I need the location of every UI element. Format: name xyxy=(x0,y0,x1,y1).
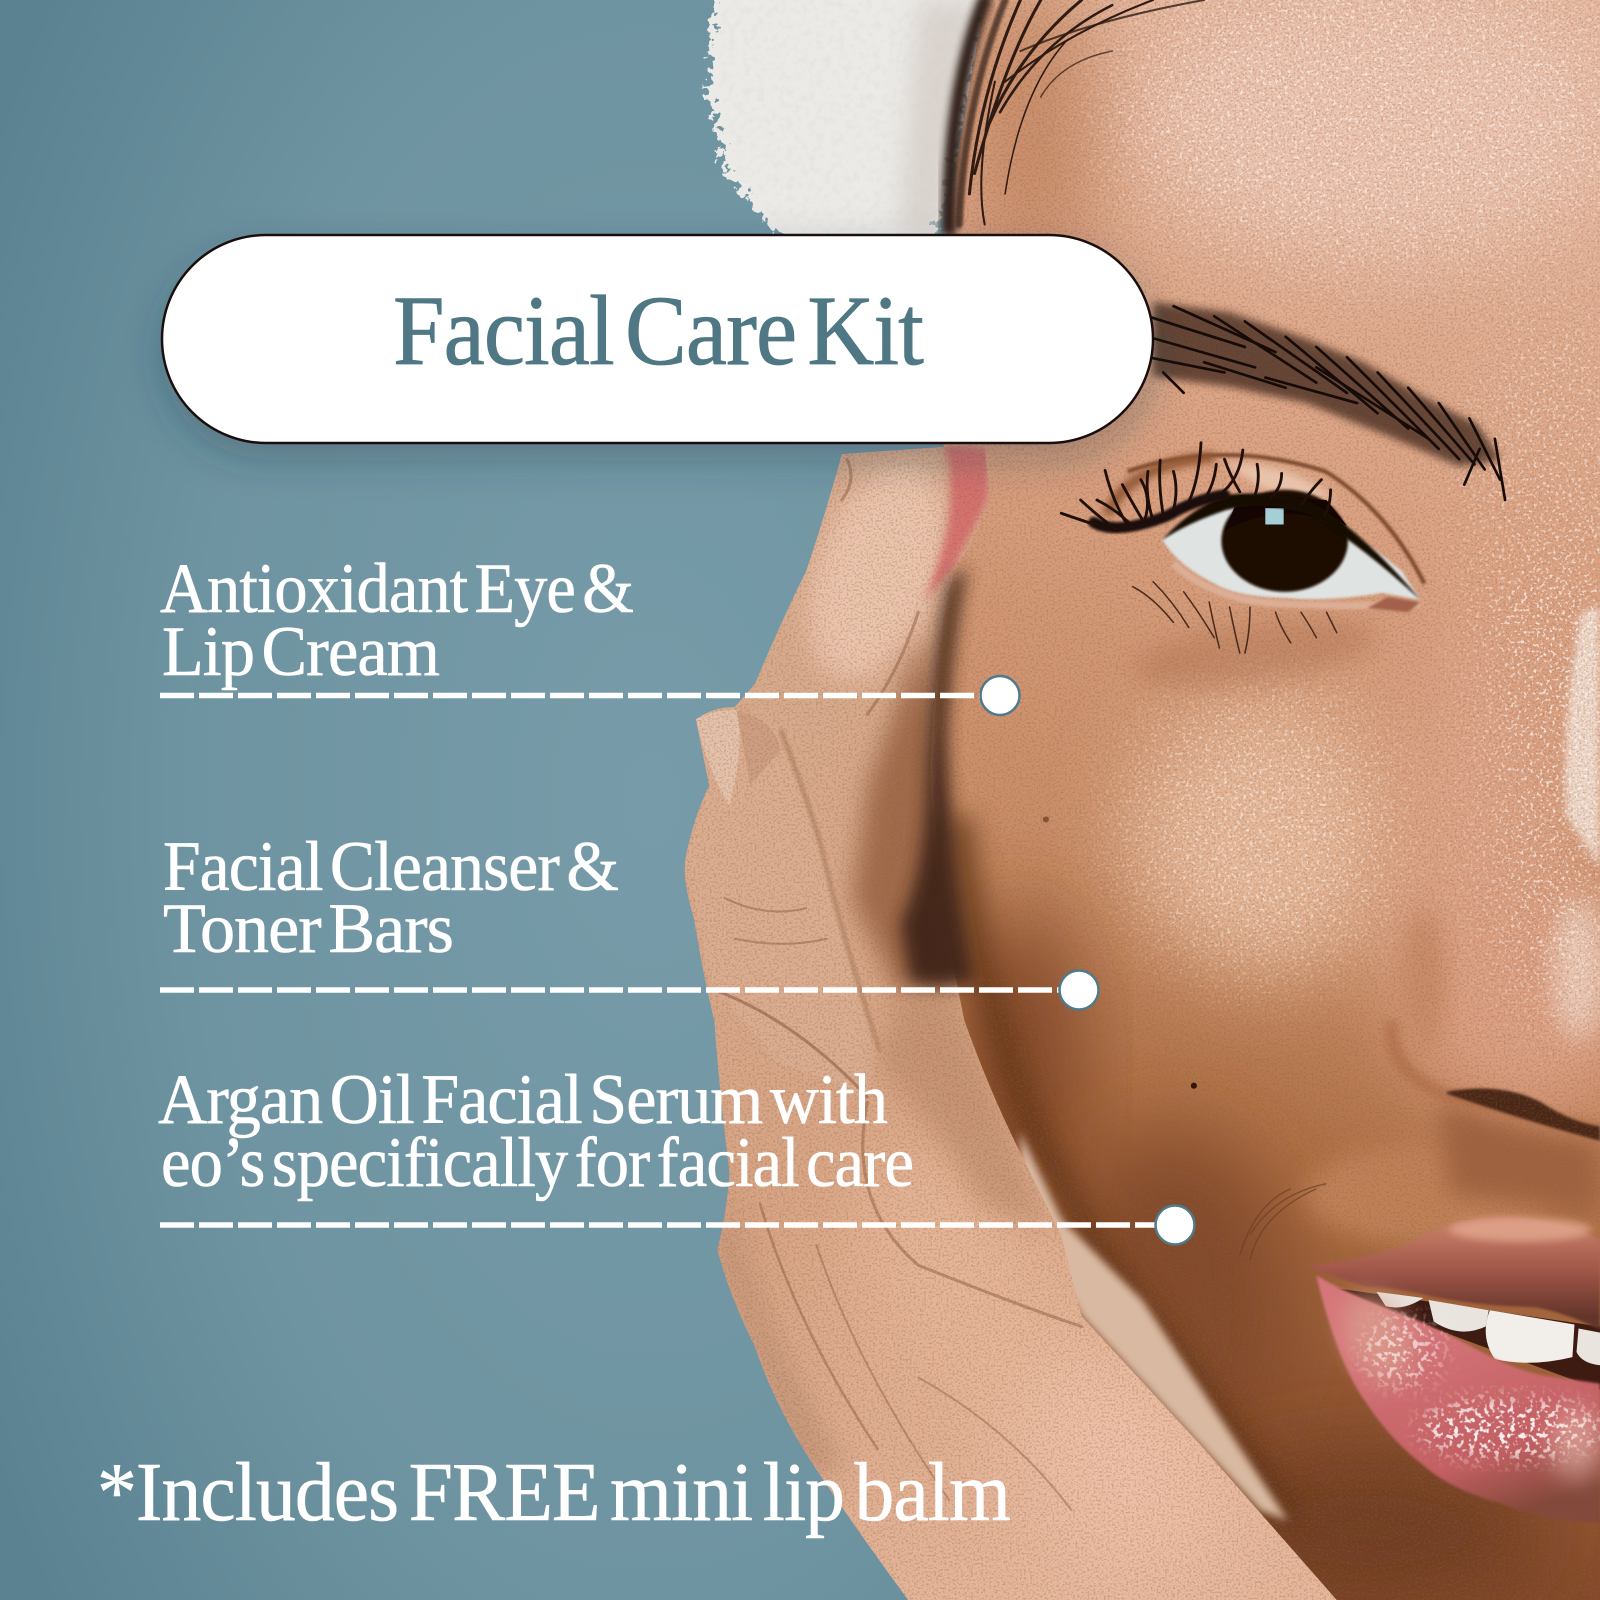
teeth xyxy=(1377,1292,1600,1365)
cheek fuzz near lip xyxy=(1240,1184,1327,1260)
hairline xyxy=(949,0,1204,230)
marker dot 2 xyxy=(1060,970,1098,1010)
item 2: Facial Cleanser & Toner Bars xyxy=(160,828,1098,1010)
nose shadow xyxy=(1439,1102,1600,1214)
item 1: Antioxidant Eye & Lip Cream xyxy=(160,550,1020,715)
lower lip xyxy=(1316,1276,1600,1523)
moles xyxy=(1191,1083,1197,1089)
jaw contact shadow xyxy=(959,816,1296,1520)
eye xyxy=(1061,443,1424,700)
dashed leader 1 xyxy=(160,693,982,698)
dark gap between finger and face xyxy=(900,566,974,987)
item 2: Facial Cleanser & Toner Bars: Toner Bars xyxy=(163,890,453,968)
portrait photo illustration xyxy=(673,0,1600,1600)
eyelid crease xyxy=(1128,455,1424,584)
eyebrow xyxy=(1148,302,1505,500)
lower lashes xyxy=(1133,582,1337,653)
skin grain and highlights xyxy=(878,0,1600,1600)
item 1: Antioxidant Eye & Lip Cream: Lip Cream xyxy=(162,613,440,691)
iris highlight xyxy=(1265,508,1284,524)
marker dot 1 xyxy=(980,676,1020,715)
title pill xyxy=(162,235,1153,443)
upper lashes xyxy=(1061,443,1331,531)
item 2: Facial Cleanser & Toner Bars: Facial Cleanser & xyxy=(163,828,618,906)
front thumb xyxy=(686,707,878,1097)
title text: Facial Care Kit xyxy=(393,275,924,386)
upper lash line xyxy=(1162,493,1420,600)
dashed leader 2 xyxy=(160,987,1062,993)
dashed leader 3 xyxy=(160,1222,1158,1228)
item 1: Antioxidant Eye & Lip Cream: Antioxidant Eye & xyxy=(160,550,633,628)
face skin xyxy=(878,0,1600,1600)
hand texture xyxy=(673,439,1357,1600)
item 3: Argan Oil Facial Serum: Argan Oil Facial Serum with xyxy=(158,1061,887,1139)
lips and teeth xyxy=(1307,1216,1600,1523)
hand xyxy=(673,439,1357,1600)
lower hand tone xyxy=(858,1146,1026,1352)
item 3: Argan Oil Facial Serum: eo’s specifically for facial care xyxy=(161,1124,913,1202)
footnote: *Includes FREE mini lip balm xyxy=(97,1446,1011,1539)
shine on nose and cheek xyxy=(1565,607,1600,867)
hand creases xyxy=(714,459,1082,1510)
item 3: Argan Oil Facial Serum xyxy=(158,1061,1194,1244)
index finger tone xyxy=(801,459,948,686)
mouth interior xyxy=(1334,1288,1600,1390)
towel strip beside the jaw xyxy=(1020,1133,1288,1520)
inner palm shadow xyxy=(852,633,954,995)
iris xyxy=(1221,490,1348,592)
white towel xyxy=(709,0,990,245)
sclera xyxy=(1162,498,1420,600)
upper lip xyxy=(1307,1216,1600,1330)
lower lid xyxy=(1173,563,1420,606)
marker dot 3 xyxy=(1156,1206,1194,1244)
